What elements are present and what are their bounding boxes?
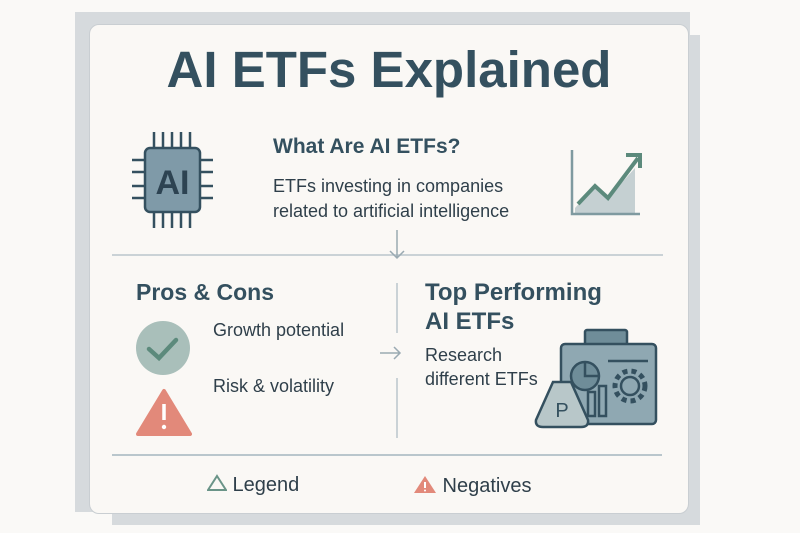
legend: negatives: Negatives — [443, 475, 532, 497]
title: AI ETFs Explained — [167, 41, 611, 98]
vertical divider with arrow — [380, 283, 401, 438]
icon: portfolio — [534, 328, 658, 428]
text: definition — [273, 176, 509, 221]
icon: warning — [136, 388, 192, 436]
divider with down arrow — [112, 230, 663, 259]
text: definition: ETFs investing in companies — [273, 176, 503, 196]
heading: top performing: Top Performing — [425, 279, 602, 306]
icon: growth chart — [570, 150, 642, 216]
text: research: different ETFs — [425, 369, 538, 389]
card — [89, 24, 689, 514]
icon: check — [136, 321, 190, 375]
heading: top performing — [425, 279, 602, 335]
text: growth: Growth potential — [213, 320, 344, 340]
heading: pros & cons: Pros & Cons — [136, 279, 274, 305]
text: research — [425, 345, 538, 389]
icon: portfolio: P — [555, 400, 569, 422]
heading: what are AI ETFs: What Are AI ETFs? — [273, 135, 460, 158]
bottom divider — [112, 454, 662, 456]
text: definition: related to artificial intelligence — [273, 201, 509, 221]
text: risk: Risk & volatility — [213, 376, 334, 396]
text: research: Research — [425, 345, 502, 365]
icon: AI chip: AI — [156, 164, 190, 202]
icon: AI chip — [132, 132, 213, 228]
legend item: Legend — [233, 474, 299, 496]
backdrop shadow — [75, 12, 690, 512]
heading: top performing: AI ETFs — [425, 308, 514, 335]
